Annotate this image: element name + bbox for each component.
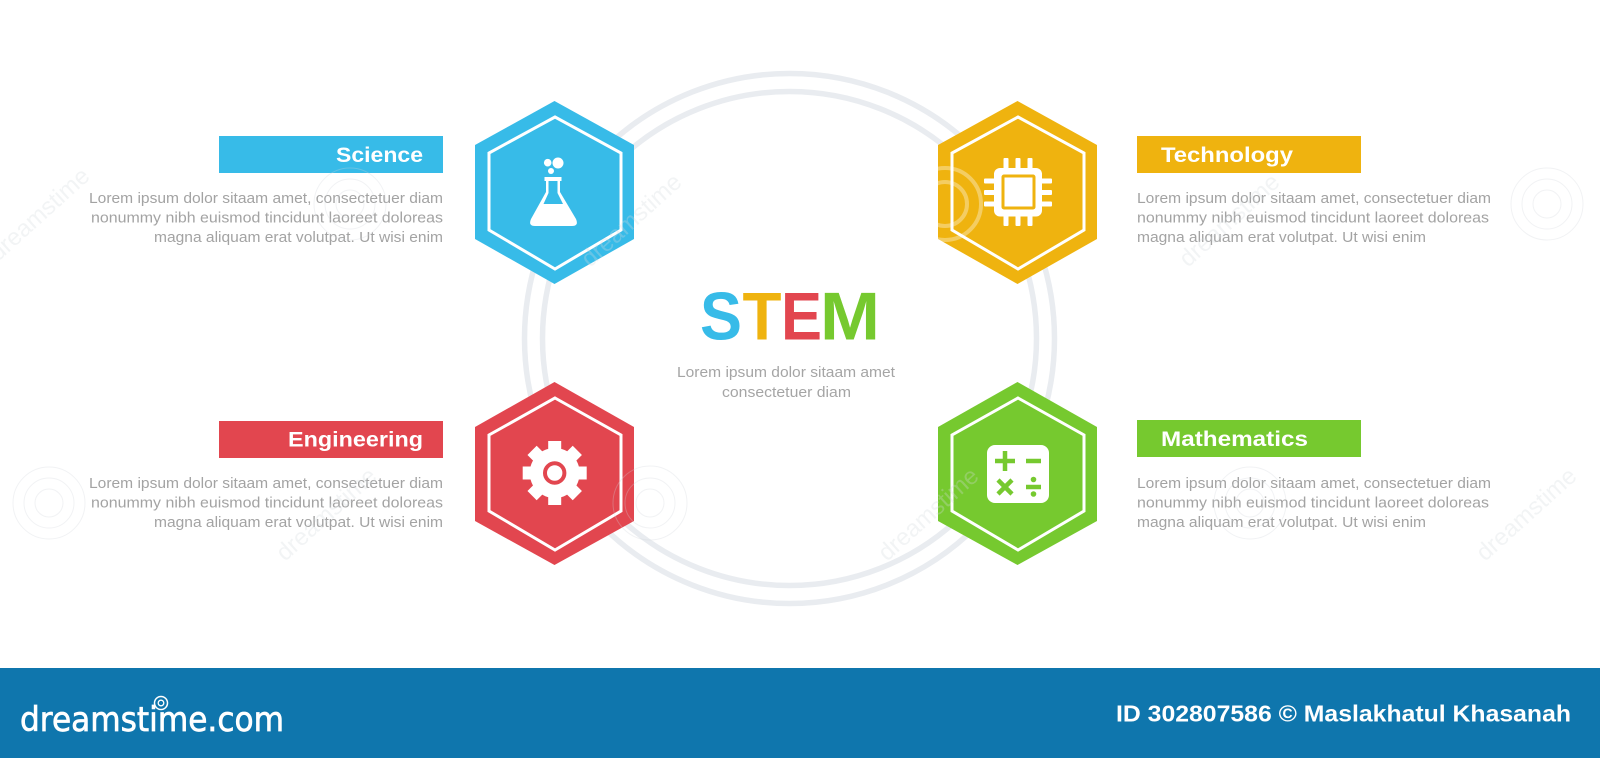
mathematics hexagon	[938, 382, 1097, 565]
watermark spirals	[13, 168, 1583, 540]
center description	[677, 364, 896, 401]
mathematics description	[1137, 475, 1491, 531]
watermark text: dreamstime	[1174, 169, 1285, 272]
watermark text: dreamstime	[576, 169, 687, 272]
center title: STEM: T	[742, 278, 782, 354]
central double ring	[524, 74, 1054, 604]
center description: Lorem ipsum dolor sitaam amet	[677, 364, 896, 381]
engineering label bar	[219, 421, 443, 458]
mathematics label bar	[1137, 420, 1361, 457]
science description: nonummy nibh euismod tincidunt laoreet doloreas	[91, 210, 443, 226]
watermark text: dreamstime	[1471, 463, 1582, 566]
icon: gear	[523, 441, 587, 505]
mathematics description: magna aliquam erat volutpat. Ut wisi enim	[1137, 514, 1426, 531]
technology description: nonummy nibh euismod tincidunt laoreet doloreas	[1137, 210, 1489, 226]
center title: STEM: E	[781, 278, 822, 354]
engineering label bar: Engineering	[288, 428, 423, 452]
engineering description: magna aliquam erat volutpat. Ut wisi enim	[154, 514, 443, 531]
center title: STEM: M	[820, 278, 880, 354]
technology label bar: Technology	[1161, 144, 1293, 167]
engineering description	[89, 475, 443, 531]
footer banner	[0, 668, 1600, 758]
science label bar	[219, 136, 443, 173]
technology description: Lorem ipsum dolor sitaam amet, consectetuer diam	[1137, 190, 1491, 207]
panel: science	[89, 101, 634, 284]
watermark text	[0, 163, 1582, 566]
mathematics description: Lorem ipsum dolor sitaam amet, consectetuer diam	[1137, 475, 1491, 492]
panel: mathematics	[938, 382, 1491, 565]
center description: consectetuer diam	[722, 384, 851, 401]
technology label bar	[1137, 136, 1361, 173]
icon: calculator	[987, 445, 1049, 503]
icon: flask	[530, 158, 577, 226]
science description: magna aliquam erat volutpat. Ut wisi enim	[154, 229, 443, 246]
watermark text: dreamstime	[873, 463, 984, 566]
center title: STEM	[700, 278, 880, 354]
image id and author credit: ID 302807586 © Maslakhatul Khasanah	[1116, 700, 1571, 726]
science description	[89, 190, 443, 246]
panel: engineering	[89, 382, 634, 565]
science description: Lorem ipsum dolor sitaam amet, consectetuer diam	[89, 190, 443, 207]
watermark text: dreamstime	[271, 463, 382, 566]
panel: technology	[938, 101, 1491, 284]
engineering description: Lorem ipsum dolor sitaam amet, consectetuer diam	[89, 475, 443, 492]
mathematics label bar: Mathematics	[1161, 428, 1308, 451]
engineering hexagon	[475, 382, 634, 565]
technology description: magna aliquam erat volutpat. Ut wisi enim	[1137, 229, 1426, 246]
dreamstime logo: dreamstime.com	[20, 700, 284, 740]
icon: microchip	[984, 158, 1052, 226]
science label bar: Science	[336, 144, 423, 167]
technology description	[1137, 190, 1491, 246]
mathematics description: nonummy nibh euismod tincidunt laoreet doloreas	[1137, 494, 1489, 512]
center title: STEM: S	[700, 278, 742, 354]
technology hexagon	[938, 101, 1097, 284]
science hexagon	[475, 101, 634, 284]
engineering description: nonummy nibh euismod tincidunt laoreet doloreas	[91, 494, 443, 512]
